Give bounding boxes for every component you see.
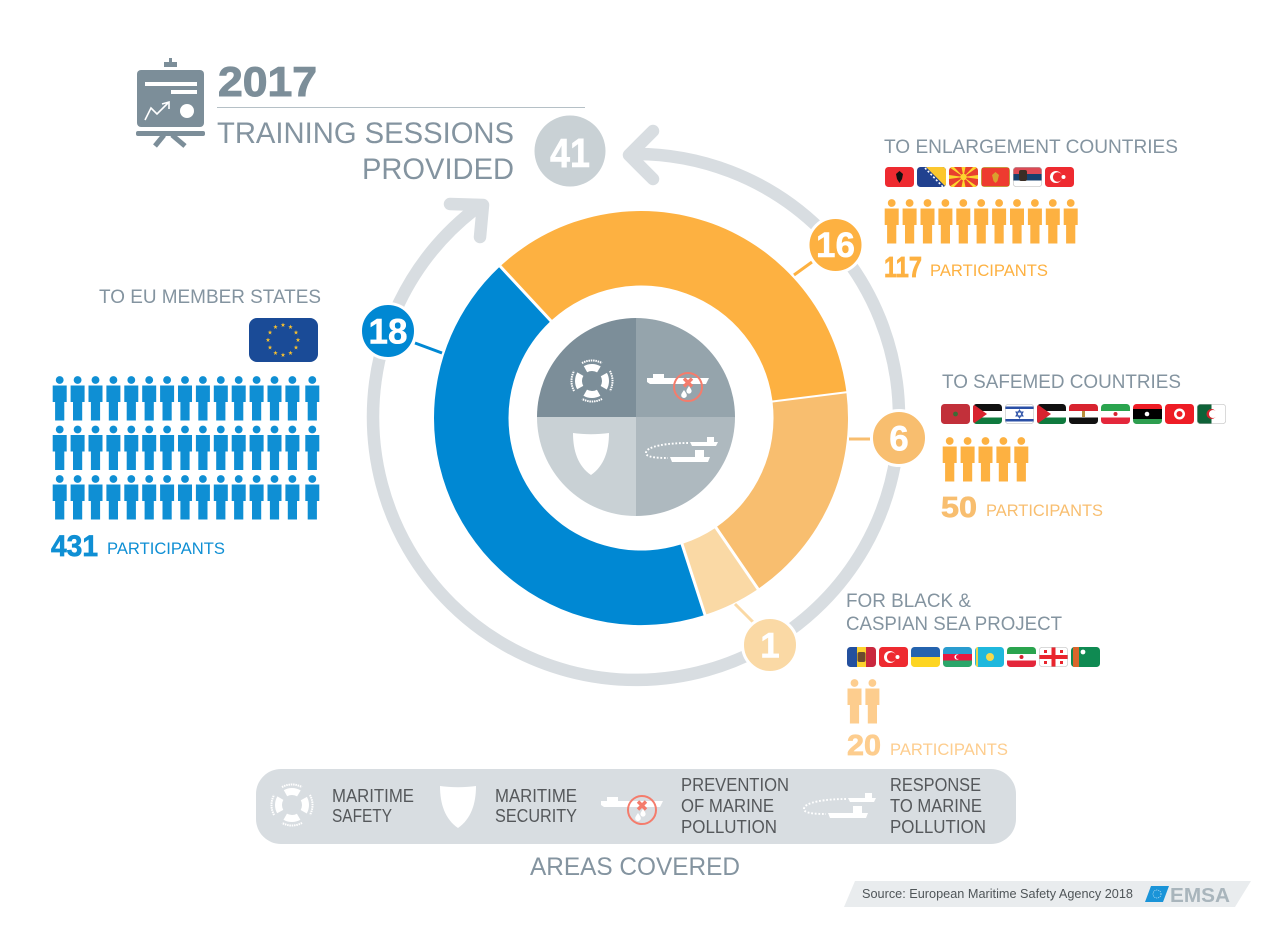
icon: lifebuoy	[571, 360, 613, 402]
icon: response ships	[646, 437, 718, 462]
legend text: maritime safety: SAFETY	[332, 806, 392, 826]
total badge: 41	[534, 116, 606, 186]
legend text: maritime safety	[332, 786, 414, 826]
arrow: ring to total via right side	[629, 131, 899, 644]
subtitle: PROVIDED	[362, 153, 514, 186]
heading	[846, 591, 1062, 635]
segment: Black and Caspian Sea	[683, 528, 757, 614]
segment: EU member states	[434, 267, 704, 625]
flags row	[941, 404, 1226, 424]
pictogram: participants	[885, 199, 1078, 244]
panel: SAFEMED countries	[941, 372, 1226, 524]
icon: presentation board	[136, 58, 205, 146]
donut chart	[434, 211, 848, 625]
legend text: prevention of marine pollution	[681, 775, 789, 837]
pictogram: participants	[53, 376, 319, 520]
legend caption: AREAS COVERED	[530, 853, 740, 881]
heading: CASPIAN SEA PROJECT	[846, 614, 1062, 635]
badge: 18 sessions: 18	[369, 312, 407, 352]
flags row	[885, 167, 1074, 187]
year heading: 2017	[218, 58, 317, 105]
panel: Black and Caspian Sea project	[846, 591, 1100, 762]
badge: 16 sessions	[794, 218, 863, 275]
centre pie: areas covered	[537, 318, 735, 516]
badge: 1 session	[735, 604, 798, 672]
badge: 16 sessions: 16	[816, 226, 855, 265]
badge: 1 session: 1	[760, 626, 780, 666]
subtitle	[217, 117, 514, 186]
legend icon: ship and pollution	[601, 796, 663, 824]
participants count	[941, 492, 1103, 524]
legend text: maritime safety: MARITIME	[332, 786, 414, 806]
segment: enlargement	[501, 211, 846, 400]
segment: SAFEMED	[717, 393, 848, 588]
pictogram: participants	[848, 679, 879, 724]
pictogram: participants	[943, 437, 1028, 482]
participants count	[847, 730, 1008, 762]
legend text: maritime security: SECURITY	[495, 806, 577, 826]
legend icon: shield	[440, 786, 476, 828]
panel: legend areas covered	[256, 769, 1016, 844]
legend icon: lifebuoy	[271, 784, 313, 826]
icon: shield	[573, 433, 609, 475]
panel: EU member states	[51, 287, 321, 563]
participants count: 431	[51, 530, 98, 563]
header: 2017 training sessions	[136, 58, 606, 186]
badge: 18 sessions	[360, 304, 442, 358]
legend text: maritime security	[495, 786, 577, 826]
arrow: ring to total via left side	[373, 204, 769, 680]
heading: TO ENLARGEMENT COUNTRIES	[884, 137, 1178, 158]
participants count	[51, 530, 225, 563]
legend text: response to marine pollution: TO MARINE	[890, 796, 982, 816]
total badge: 41: 41	[550, 130, 590, 176]
participants count: PARTICIPANTS	[930, 261, 1048, 280]
participants count: 20	[847, 730, 881, 762]
flags row	[847, 647, 1100, 667]
EMSA logo	[1145, 885, 1230, 907]
badge: 6 sessions: 6	[889, 420, 909, 458]
participants count: PARTICIPANTS	[890, 740, 1008, 759]
legend text: maritime security: MARITIME	[495, 786, 577, 806]
legend icon: response ships	[804, 793, 876, 818]
legend text: prevention of marine pollution: OF MARINE	[681, 796, 774, 816]
participants count	[884, 252, 1048, 284]
legend text: prevention of marine pollution: PREVENTION	[681, 775, 789, 795]
participants count: 50	[941, 492, 977, 524]
EMSA logo: EMSA	[1170, 885, 1230, 907]
badge: 6 sessions	[849, 410, 926, 466]
subtitle: TRAINING SESSIONS	[217, 117, 514, 150]
source bar	[844, 881, 1251, 907]
participants count: PARTICIPANTS	[986, 501, 1103, 520]
legend text: response to marine pollution	[890, 775, 986, 837]
participants count: 117	[884, 252, 922, 284]
legend text: response to marine pollution: POLLUTION	[890, 817, 986, 837]
heading: FOR BLACK &	[846, 591, 971, 612]
heading: TO EU MEMBER STATES	[99, 287, 321, 308]
icon: EU flag	[249, 318, 318, 362]
participants count: PARTICIPANTS	[107, 539, 225, 558]
panel: enlargement countries	[884, 137, 1178, 284]
icon: ship and pollution	[647, 373, 709, 401]
legend text: response to marine pollution: RESPONSE	[890, 775, 981, 795]
source text: Source: European Maritime Safety Agency 2018	[862, 886, 1133, 901]
legend text: prevention of marine pollution: POLLUTION	[681, 817, 777, 837]
heading: TO SAFEMED COUNTRIES	[942, 372, 1181, 393]
